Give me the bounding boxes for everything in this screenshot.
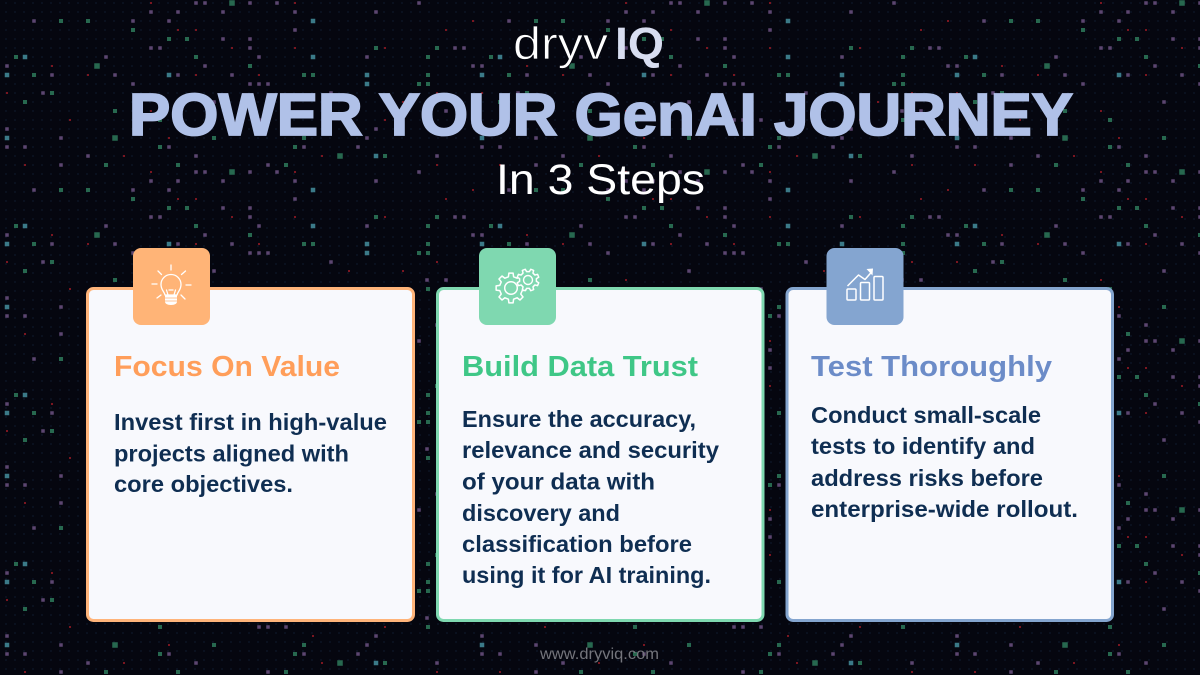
heading: Test Thoroughly (811, 351, 1052, 383)
card background (787, 288, 1112, 620)
panel: build data trust (438, 248, 763, 620)
subtitle: In 3 Steps (496, 156, 705, 204)
body text (462, 406, 719, 588)
heading: Focus On Value (114, 351, 340, 383)
title: POWER YOUR GenAI JOURNEY (129, 82, 1073, 148)
body text: projects aligned with (114, 440, 349, 466)
icon: gears (479, 248, 556, 325)
body text: using it for AI training. (462, 562, 711, 588)
card background (438, 288, 763, 620)
body text: of your data with (462, 468, 655, 494)
logo: dryvIQ: dryv (513, 18, 609, 69)
body text: discovery and (462, 500, 620, 526)
heading: Build Data Trust (462, 351, 699, 383)
icon: growth chart (826, 248, 904, 325)
logo: dryvIQ: IQ (615, 18, 664, 69)
body text (114, 409, 387, 497)
panel: test thoroughly (787, 248, 1112, 620)
body text: Ensure the accuracy, (462, 406, 696, 432)
body text: Invest first in high-value (114, 409, 387, 435)
card background (88, 288, 414, 620)
body text: address risks before (811, 465, 1043, 491)
body text: classification before (462, 531, 692, 557)
logo: dryvIQ (513, 18, 664, 69)
body text: Conduct small-scale (811, 402, 1041, 428)
body text: enterprise-wide rollout. (811, 496, 1078, 522)
body text: tests to identify and (811, 433, 1035, 459)
icon: light bulb (133, 248, 210, 325)
body text (811, 402, 1078, 522)
body text: core objectives. (114, 471, 293, 497)
body text: relevance and security (462, 437, 719, 463)
footer url: www.dryviq.com (539, 646, 659, 663)
panel: focus on value (88, 248, 414, 620)
